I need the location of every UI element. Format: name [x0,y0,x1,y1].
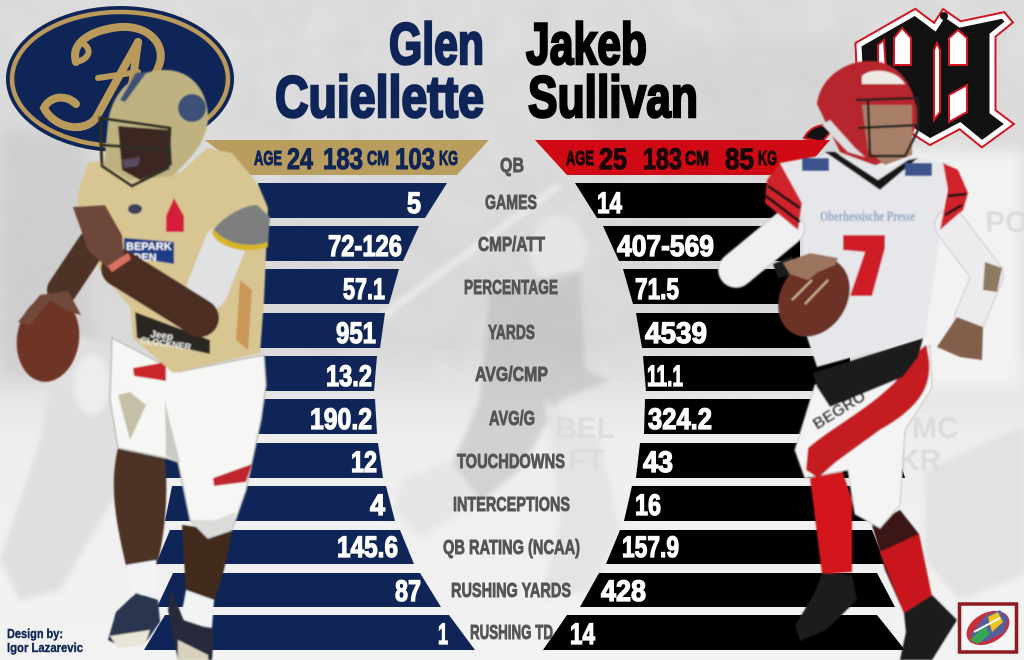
text: left player values [310,187,448,651]
text: left player values: 5 [407,187,421,220]
text: stat category labels: PERCENTAGE [464,277,558,299]
panel: right player bio band: CM [685,148,709,170]
text: right player values: 43 [643,446,673,479]
title: right player name: Jakeb [526,12,647,77]
panel: left player bio band: KG [439,148,458,170]
left player jersey: BEPARK [126,241,172,253]
logo: left team oval [6,6,234,152]
left player arms and football [11,205,270,386]
panel: left player bio band [205,140,489,176]
icon: right player quarterback [736,61,1002,660]
panel: right player bio band: AGE [566,148,594,170]
left player helmet and face [100,70,208,186]
right player football and hand [764,244,864,350]
text: stat category labels: RUSHING TD [470,622,553,644]
text: left player values: 951 [336,317,376,350]
text: right player values: 16 [635,489,661,522]
text: left player values: 1 [438,618,448,651]
text: stat category labels: AVG/G [489,408,535,430]
title: right player name: Sullivan [528,65,698,130]
right player jersey [780,152,950,367]
panel: right player bio band [535,140,830,176]
text: left player values: 190.2 [310,403,372,436]
panel: right player bio band: 85 [725,143,754,176]
panel: right player bio band: 183 [643,143,682,176]
text: right player values: 11.1 [647,360,683,393]
title: left player name: Cuiellette [275,65,484,130]
right player pants: BEGRO [810,388,869,433]
text: right player values: 407-569 [617,230,714,263]
title: right player name [526,12,698,130]
text: right player values: 14 [597,187,622,220]
panel: right player bio band: KG [758,148,777,170]
text: stat category labels: QB [500,155,524,177]
text: right player values: 4539 [645,317,707,350]
text: left player values: 13.2 [326,360,372,393]
panel: right player bio band: 25 [599,143,627,176]
title: left player name: Glen [389,12,484,77]
background: blurred banner lettering [555,206,1024,477]
text: stat category labels: AVG/CMP [475,364,548,386]
left player shoes [108,590,214,660]
panel: left player stat bars [144,183,475,650]
background: blurred banner lettering: FT [568,444,605,477]
panel: left player bio band: 24 [287,143,313,176]
text: designer credit: Design by: [7,626,63,641]
panel: right player stat bars [543,183,905,650]
text: left player values: 12 [351,446,377,479]
text: stat category labels: INTERCEPTIONS [453,494,570,516]
left player jersey: CLOCKNER [140,335,192,352]
icon: left player quarterback [11,70,270,660]
icon: multicolour football badge [960,604,1016,652]
title: left player name [275,12,484,130]
text: right player values: 14 [570,618,595,651]
text: stat category labels: TOUCHDOWNS [457,451,565,473]
background: blurred banner lettering: BEL [555,412,615,445]
text: right player values [570,187,714,651]
background: blurred banner lettering: KR [898,444,942,477]
text: designer credit: Igor Lazarevic [7,640,83,655]
panel: left player bio band: 103 [395,143,435,176]
right player jersey: Oberhessische Presse [820,209,915,225]
text: left player values: 145.6 [337,531,398,564]
left player jersey: Jeep [150,329,174,343]
panel: left player bio band: CM [367,148,389,170]
right player helmet and face [817,61,918,165]
logo: right team gothic letters [804,12,1008,143]
right player sleeves and arms [736,163,1002,360]
text: stat category labels: CMP/ATT [478,234,545,256]
text: left player values: 72-126 [328,230,402,263]
right player pants [795,345,932,528]
text: right player values: 324.2 [648,403,712,436]
panel: left player bio band: AGE [254,148,282,170]
left player jersey: SDEN [126,252,157,264]
right player black belt [813,338,923,407]
panel: left player bio band: 183 [323,143,363,176]
text: right player values: 157.9 [622,531,679,564]
background: ghost players [0,185,1024,600]
text: left player values: 87 [395,575,421,608]
left player jersey [78,148,268,373]
text: stat category labels: YARDS [488,322,535,344]
text: designer credit [7,626,83,655]
text: left player values: 57.1 [343,273,385,306]
right player shoes [795,573,957,660]
background: blurred banner lettering: MC [912,412,959,445]
text: stat category labels: RUSHING YARDS [451,580,571,602]
left player legs [114,448,232,628]
text: right player values: 428 [601,575,646,608]
left player pants [110,338,266,538]
text: right player values: 71.5 [635,273,679,306]
text: left player values: 4 [370,489,385,522]
text: stat category labels: GAMES [485,192,537,214]
text: stat category labels: QB RATING (NCAA) [443,537,580,559]
right player legs and socks [810,470,932,613]
text: stat category labels [443,155,580,644]
